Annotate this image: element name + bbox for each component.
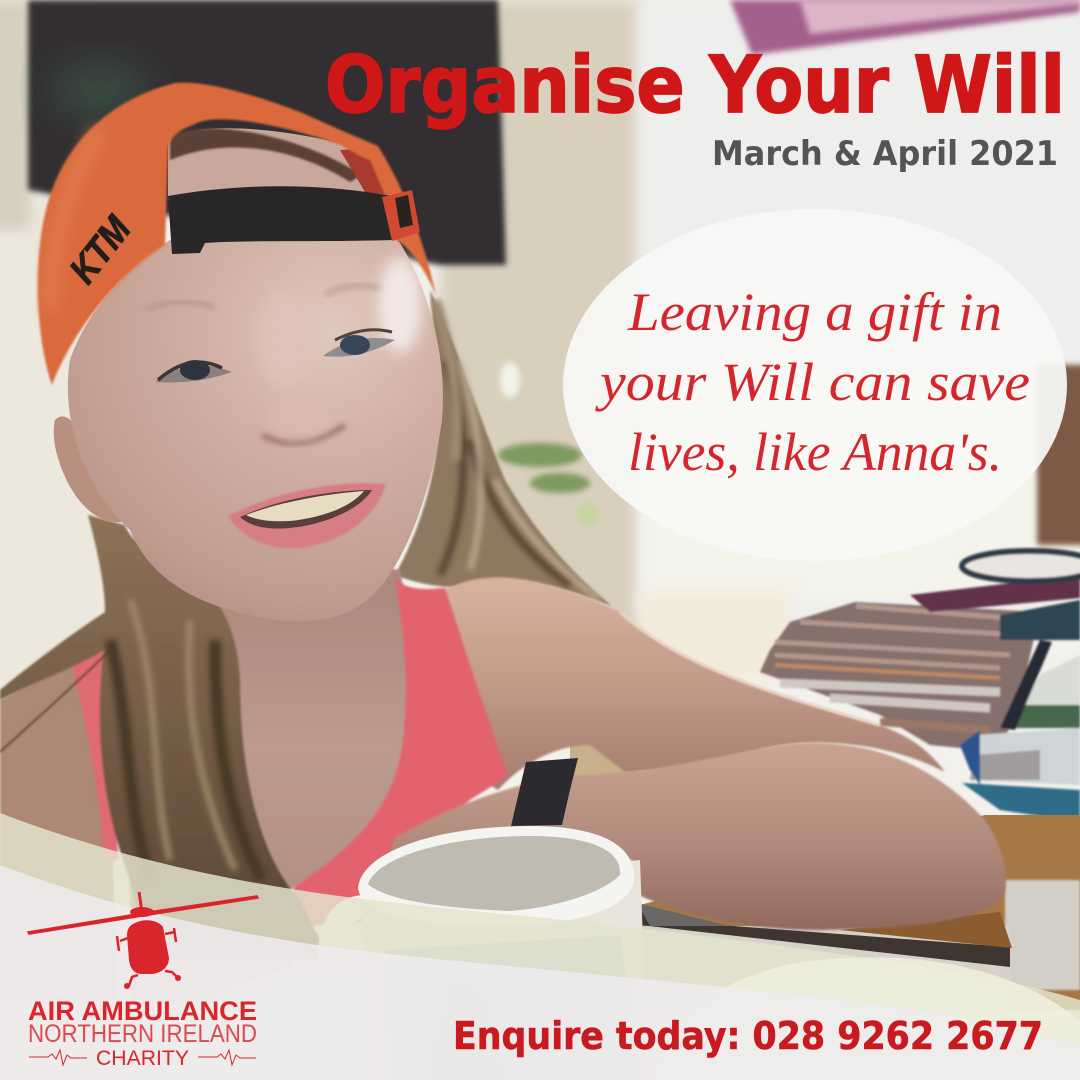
hair behind right shoulder <box>395 290 612 606</box>
bubble text: your Will can save <box>595 352 1030 412</box>
left shoulder <box>0 640 115 1000</box>
enquire phone line: Enquire today: 028 9262 2677 <box>453 1014 1043 1058</box>
eyes and facial features <box>145 285 395 548</box>
subtitle date: March & April 2021 <box>712 134 1058 174</box>
forearm <box>380 743 1006 930</box>
bottom wave: white panel <box>0 865 1080 1080</box>
mug rim <box>358 826 634 926</box>
smartwatch <box>511 758 578 826</box>
mug <box>318 826 648 1080</box>
neck and chest <box>130 540 420 1000</box>
pink top <box>270 578 508 930</box>
hair main lock <box>0 515 330 960</box>
strap tab <box>382 190 420 241</box>
cap shell <box>38 83 436 385</box>
mug handle <box>318 895 362 985</box>
mug body <box>360 860 648 1080</box>
inside opening <box>168 128 395 200</box>
face <box>68 235 443 622</box>
white blurred hand under panel <box>130 965 370 1080</box>
logo text: AIR AMBULANCE <box>28 996 257 1026</box>
bubble text: Leaving a gift in <box>627 282 1002 342</box>
speech bubble <box>563 209 1067 561</box>
left pink strap <box>70 632 118 860</box>
bubble text <box>595 282 1030 482</box>
logo: Air Ambulance NI <box>28 892 258 1070</box>
KTM cap badge: KTM <box>62 208 140 292</box>
logo: Air Ambulance NI: NORTHERN IRELAND <box>28 1020 257 1048</box>
orange cap <box>38 83 436 385</box>
golden gap under elbow <box>570 742 635 782</box>
bottom wave: lighter blob <box>650 958 1080 1080</box>
ear <box>54 416 135 522</box>
icon: helicopter <box>28 892 258 989</box>
bubble text: lives, like Anna's. <box>628 422 1002 482</box>
right hair strand over face edge <box>436 300 457 460</box>
books stack <box>760 551 1080 822</box>
table <box>640 815 1080 1010</box>
arm highlights <box>620 612 880 725</box>
logo: Air Ambulance NI: CHARITY <box>96 1047 189 1070</box>
upper arm <box>445 577 945 790</box>
black strap <box>168 186 396 254</box>
bottom wave: pale green band <box>0 813 1080 1080</box>
